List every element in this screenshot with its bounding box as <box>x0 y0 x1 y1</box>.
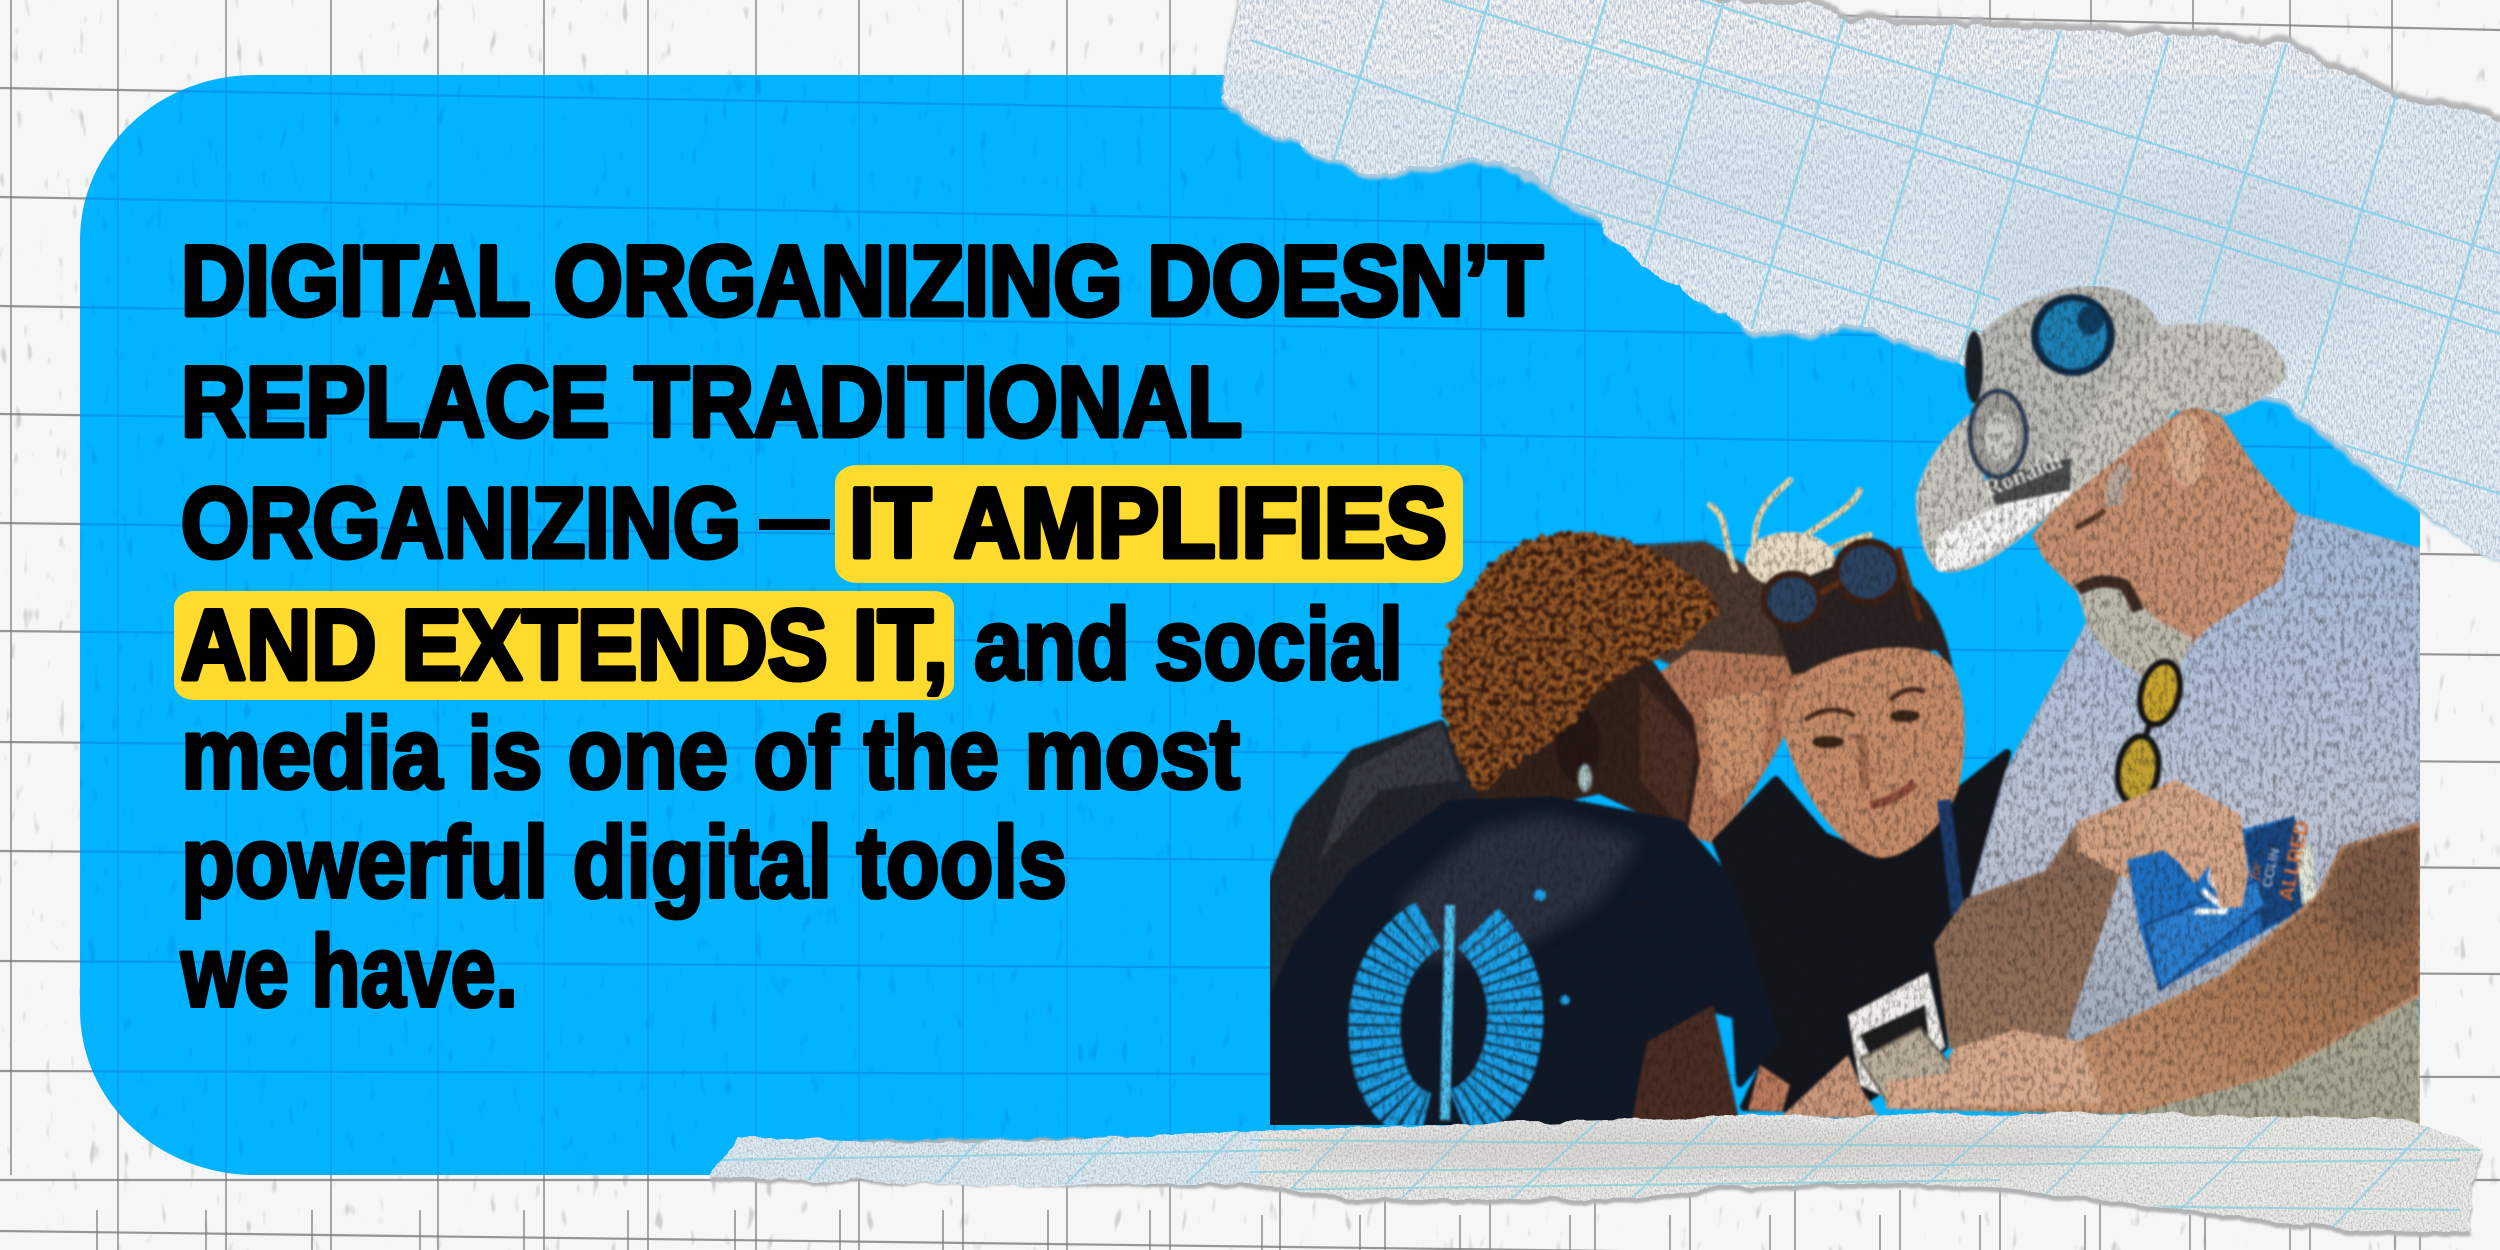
curly hair <box>1441 532 1720 795</box>
line 4 highlighted: AND EXTENDS IT, <box>181 589 948 700</box>
line 7: we have. <box>180 916 518 1028</box>
line 3 start: ORGANIZING <box>181 467 741 578</box>
line 2: REPLACE TRADITIONAL <box>181 346 1242 457</box>
blue dotted logo <box>1374 905 1515 1120</box>
person: man in dark shirt at back <box>1270 723 1500 1120</box>
olive shirt shadow <box>2135 994 2420 1125</box>
dark round badge <box>2031 294 2115 376</box>
person: man in cowboy hat <box>1748 286 2420 1125</box>
line 4 end: and social <box>974 589 1403 701</box>
phone <box>1860 1028 1959 1103</box>
right forearm and hand <box>1888 824 2420 1113</box>
line 1: DIGITAL ORGANIZING DOESN’T <box>181 225 1543 336</box>
beard <box>2079 578 2190 700</box>
highlight: AND EXTENDS IT <box>174 591 954 700</box>
line 5: media is one of the most <box>181 698 1240 810</box>
arm <box>1633 1008 1736 1125</box>
person: woman center with sunglasses on head <box>1710 480 2007 1110</box>
headline text <box>174 225 1543 1028</box>
fingers over the card <box>2140 782 2246 905</box>
white badge on tee <box>1848 972 1945 1100</box>
lanyard <box>1944 800 1958 915</box>
hat: Ronaldi <box>1981 448 2066 503</box>
shirt <box>1971 514 2420 1060</box>
campaign card: VO <box>2185 852 2253 928</box>
face <box>1780 648 1965 858</box>
small hand holding phone <box>1780 1055 1880 1118</box>
campaign card <box>2127 816 2316 990</box>
campaign card: for <box>2246 860 2266 881</box>
left forearm and hand <box>1936 782 2246 1047</box>
sunglasses <box>1764 542 1920 626</box>
person: woman in front, black tee with blue logo <box>1270 532 1776 1125</box>
face <box>2035 407 2294 653</box>
woman's hand <box>1748 1065 1790 1112</box>
em dash <box>759 519 830 530</box>
highlight: IT AMPLIFIES <box>835 465 1463 583</box>
torn paper: top right <box>1219 0 2500 564</box>
black tee <box>1716 753 2007 1110</box>
line 6: powerful digital tools <box>181 807 1067 919</box>
person: man center face and hair <box>1630 546 1810 842</box>
neck and face <box>1481 650 1696 830</box>
line 3 highlighted: IT AMPLIFIES <box>849 467 1447 578</box>
photo: volunteers looking at a phone <box>1270 286 2420 1125</box>
hat <box>1916 286 2287 572</box>
torn paper: bottom strip <box>708 1111 2484 1238</box>
grey round badge <box>1970 391 2026 477</box>
campaign card: ALLRED <box>2275 819 2314 903</box>
hair <box>1770 563 1953 675</box>
tee <box>1270 800 1776 1125</box>
sunglasses on collar <box>2113 657 2186 806</box>
blonde hair tuft <box>1710 480 1870 575</box>
side badge <box>1965 331 1983 403</box>
campaign card: COLIN <box>2259 847 2282 889</box>
